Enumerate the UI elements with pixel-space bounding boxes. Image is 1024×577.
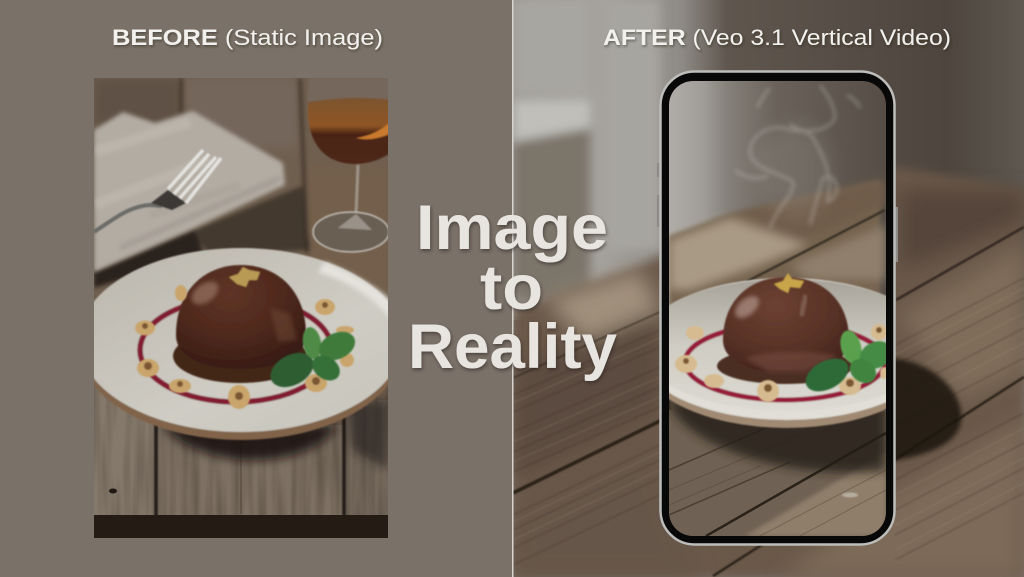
wine glass xyxy=(307,78,392,252)
raspberry sauce ring xyxy=(140,298,332,402)
table wood grain streaks xyxy=(513,278,1024,565)
screen gold leaf xyxy=(774,273,804,293)
screen lower planks xyxy=(669,400,886,536)
panel: before background xyxy=(0,0,513,577)
photo: static dessert image xyxy=(78,78,404,538)
heading: after: AFTER (Veo 3.1 Vertical Video) xyxy=(603,25,951,50)
panel: after photo background xyxy=(513,0,1024,577)
title: Image to Reality: to xyxy=(480,253,543,323)
gold leaf xyxy=(229,267,260,287)
plate shadow on table xyxy=(885,358,961,462)
screen curtain backdrop xyxy=(669,81,886,306)
chocolate dome dessert xyxy=(173,265,307,383)
mint leaves xyxy=(270,326,356,388)
hazelnuts xyxy=(135,285,354,409)
plate xyxy=(78,248,404,440)
screen chocolate dome xyxy=(717,273,853,384)
table crumb xyxy=(842,492,858,498)
phone mockup xyxy=(657,70,898,546)
phone body xyxy=(660,72,894,544)
room and curtains xyxy=(513,0,1024,320)
wooden table xyxy=(94,78,388,538)
phone screen: after scene xyxy=(669,81,886,536)
phone buttons xyxy=(657,163,898,262)
heading: before: BEFORE (Static Image) xyxy=(112,25,383,50)
wooden table with diagonal planks xyxy=(513,165,1024,577)
napkin xyxy=(94,111,285,272)
screen hazelnuts xyxy=(675,324,888,402)
screen plate xyxy=(669,277,886,429)
title: Image to Reality: Reality xyxy=(408,312,617,382)
steam xyxy=(735,85,860,228)
divider line xyxy=(512,0,514,577)
fork xyxy=(94,150,221,232)
screen mint leaves xyxy=(804,330,886,392)
screen table planks xyxy=(669,180,886,536)
title: Image to Reality xyxy=(408,193,617,382)
title: Image to Reality: Image xyxy=(416,193,608,263)
lower planks xyxy=(94,380,388,538)
